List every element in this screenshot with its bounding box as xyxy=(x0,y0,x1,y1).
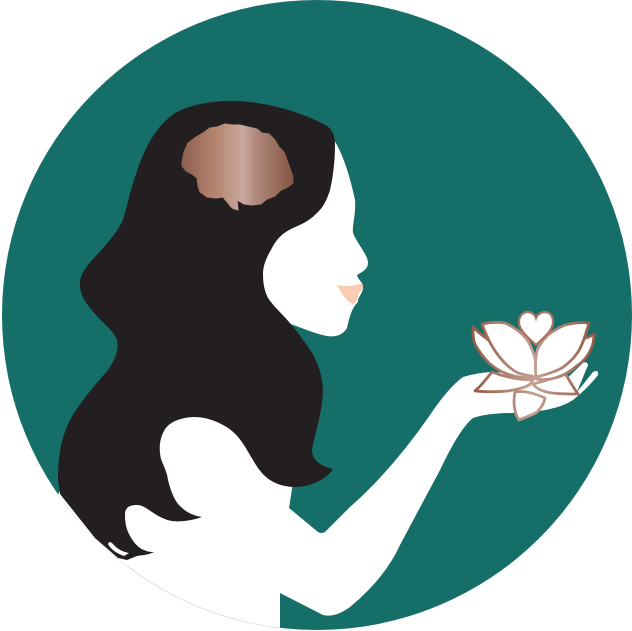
body and arm silhouette xyxy=(58,362,598,628)
petal: bottom left xyxy=(475,372,533,392)
lotus flower xyxy=(473,322,594,420)
petal: left back xyxy=(473,327,536,378)
hair sliver xyxy=(108,542,129,556)
hand fingers xyxy=(560,362,588,392)
petal: right large xyxy=(535,323,589,377)
heart xyxy=(519,312,553,345)
lips xyxy=(337,283,363,304)
hair xyxy=(58,101,335,560)
petal: bottom right xyxy=(533,373,578,394)
brain xyxy=(182,124,293,210)
faint circle edge xyxy=(127,566,280,628)
face xyxy=(255,135,368,336)
petal: right back xyxy=(536,334,594,380)
petal: bottom centre xyxy=(514,391,545,420)
petal: left large xyxy=(482,322,537,377)
